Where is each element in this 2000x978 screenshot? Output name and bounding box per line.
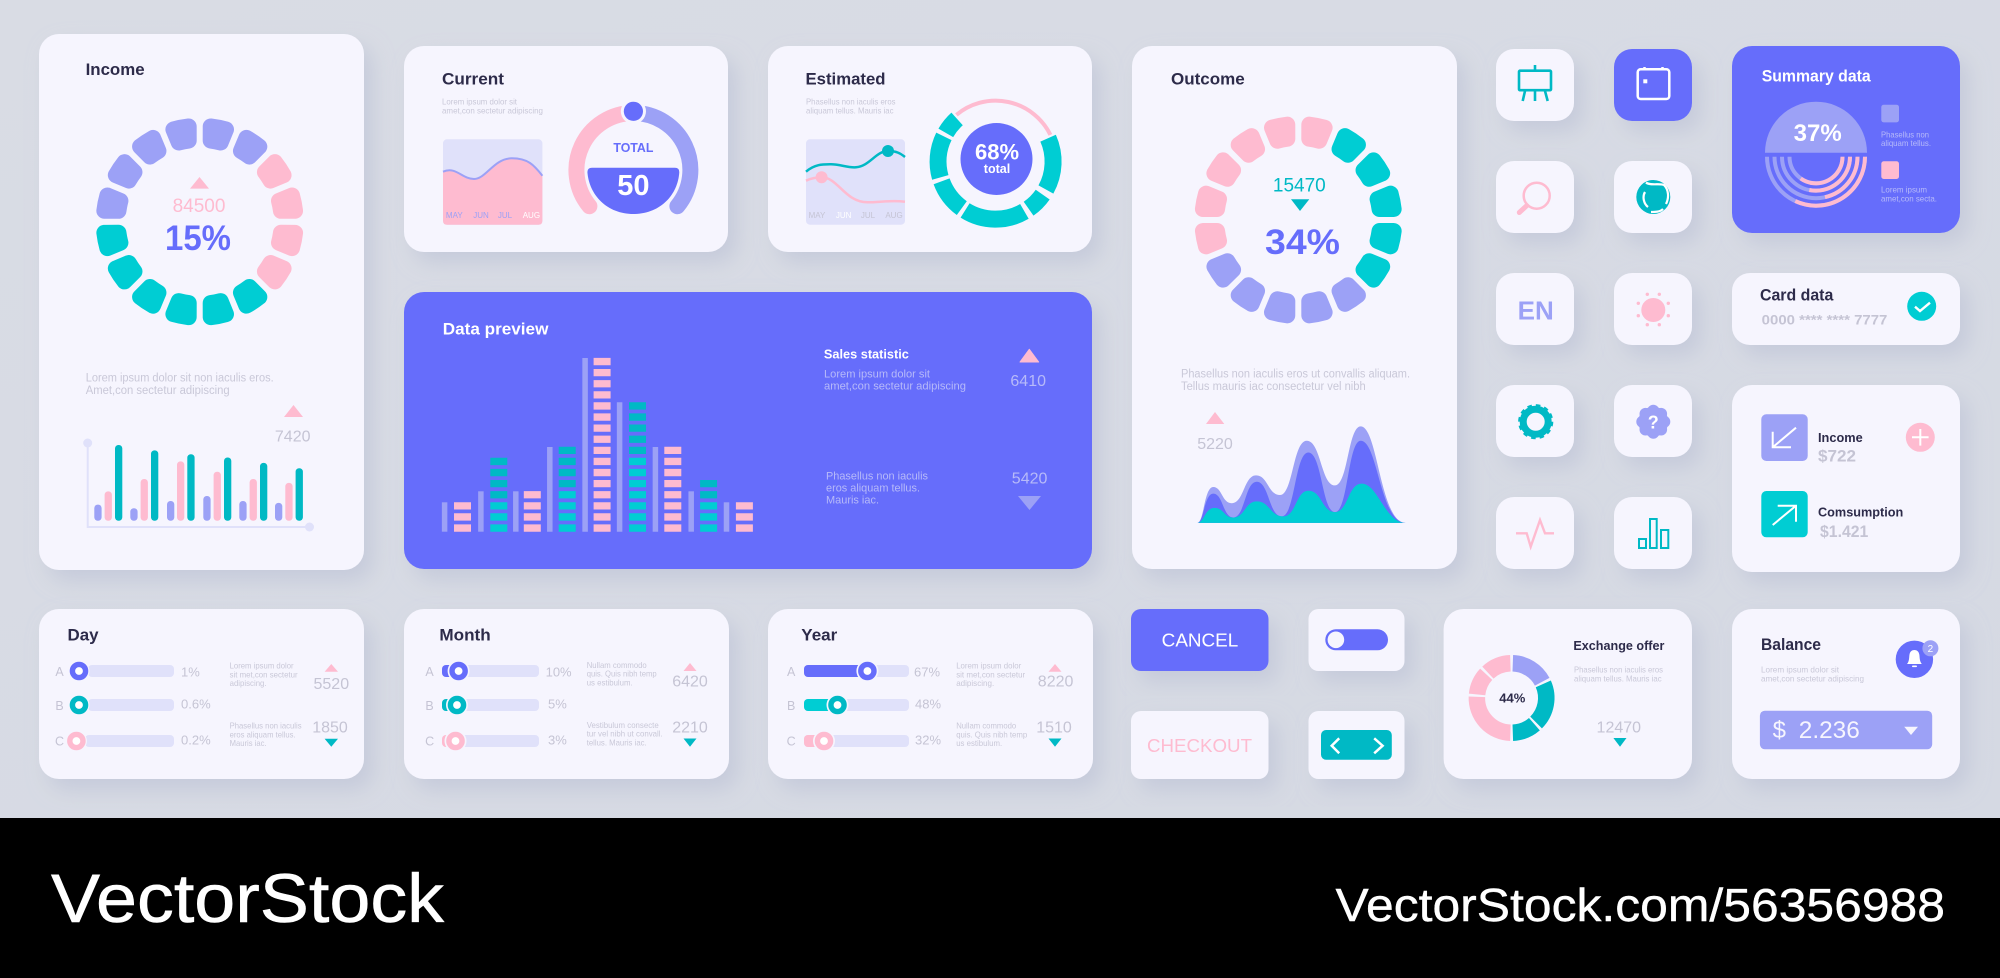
- income percent: 15%: [165, 219, 231, 258]
- button: cancel: [1131, 609, 1268, 671]
- year title: Year: [801, 626, 838, 645]
- panel: summary data: [1732, 46, 1960, 233]
- panel: current: [404, 46, 728, 252]
- month sliders: [425, 660, 572, 752]
- year sliders: C: [787, 735, 796, 749]
- arrow down: [1018, 496, 1041, 510]
- card number: 0000 **** **** 7777: [1762, 312, 1887, 327]
- panel: exchange offer: [1444, 609, 1692, 779]
- month descriptions: Vestibulum consecte: [587, 720, 659, 730]
- month stats: 2210: [672, 719, 708, 736]
- outcome description: [1181, 368, 1410, 393]
- year descriptions: quis. Quis nibh temp: [956, 729, 1027, 739]
- balance dropdown: $: [1773, 717, 1786, 744]
- segmented bar chart: [445, 358, 744, 532]
- icon: globe: [1614, 161, 1692, 233]
- estimated description: Phasellus non iaculis eros: [806, 97, 896, 107]
- panel: outcome: [1132, 46, 1457, 569]
- footer logo: VectorStock: [51, 860, 445, 937]
- day sliders: 0.2%: [181, 733, 211, 748]
- year descriptions: [956, 661, 1027, 748]
- balance title: Balance: [1761, 635, 1821, 654]
- month sliders: 10%: [546, 665, 572, 680]
- half-donut chart: [1765, 102, 1867, 206]
- year sliders: [787, 660, 941, 752]
- second description: eros aliquam tellus.: [826, 483, 920, 495]
- current area chart: JUL: [498, 211, 513, 220]
- current area chart: JUN: [473, 211, 489, 220]
- balance description: [1761, 665, 1864, 683]
- income label: Income: [1818, 431, 1863, 445]
- estimated line chart: MAY: [809, 211, 826, 220]
- sales description: [824, 368, 966, 393]
- icon: bar chart: [1614, 497, 1692, 569]
- pagination control: [1308, 711, 1404, 779]
- consumption amount: $1.421: [1820, 523, 1868, 541]
- arrow up: [190, 177, 209, 189]
- day sliders: B: [55, 699, 64, 713]
- exchange title: Exchange offer: [1573, 638, 1664, 653]
- year sliders: B: [787, 699, 795, 713]
- income description: Lorem ipsum dolor sit non iaculis eros.: [86, 372, 274, 384]
- second description: Phasellus non iaculis: [826, 470, 928, 482]
- month sliders: A: [425, 665, 434, 679]
- month sliders: 3%: [548, 733, 567, 748]
- year descriptions: us estibulum.: [956, 738, 1002, 748]
- legend text pink: [1881, 185, 1937, 204]
- toggle switch: [1308, 609, 1404, 671]
- panel: data preview: [404, 292, 1092, 569]
- month stats: 6420: [672, 674, 708, 691]
- outcome area chart: [1197, 426, 1406, 523]
- estimated title: Estimated: [806, 69, 886, 88]
- year sliders: 67%: [914, 665, 940, 680]
- icon: help badge: ?: [1648, 412, 1659, 432]
- arrow down: [1613, 738, 1626, 747]
- day title: Day: [68, 626, 99, 645]
- current title: Current: [442, 69, 504, 88]
- year descriptions: adipiscing.: [956, 678, 994, 688]
- check badge: [1907, 292, 1936, 321]
- card data title: Card data: [1760, 286, 1834, 305]
- year sliders: 32%: [915, 733, 941, 748]
- year sliders: 48%: [915, 697, 941, 712]
- day sliders: 0.6%: [181, 697, 211, 712]
- month descriptions: us estibulum.: [587, 677, 633, 687]
- second description: Mauris iac.: [826, 495, 879, 507]
- legend text purple: aliquam tellus.: [1881, 138, 1931, 148]
- icon: pulse: [1496, 497, 1574, 569]
- sales statistic heading: Sales statistic: [824, 347, 909, 361]
- panel: year: [768, 609, 1093, 779]
- balance description: amet,con sectetur adipiscing: [1761, 673, 1864, 683]
- footer band: [0, 818, 2000, 978]
- estimated line chart: JUN: [836, 211, 852, 220]
- month descriptions: tellus. Mauris iac.: [587, 737, 647, 747]
- income arrow tile: [1761, 414, 1808, 461]
- arrow down: [1291, 199, 1309, 211]
- sales value up: 6410: [1010, 373, 1046, 390]
- day descriptions: sit met,con sectetur: [230, 669, 298, 679]
- outcome percent: 34%: [1265, 223, 1340, 262]
- outcome description: Phasellus non iaculis eros ut convallis aliquam.: [1181, 368, 1410, 380]
- year descriptions: Lorem ipsum dolor: [956, 661, 1021, 671]
- current description: [442, 97, 543, 115]
- sales description: Lorem ipsum dolor sit: [824, 368, 930, 380]
- month sliders: C: [425, 735, 434, 749]
- month stats: [672, 663, 708, 747]
- estimated ring: total: [984, 162, 1010, 176]
- month descriptions: quis. Quis nibh temp: [587, 669, 657, 679]
- outcome segmented ring: [1200, 122, 1396, 318]
- legend text pink: Lorem ipsum: [1881, 185, 1927, 195]
- legend swatch purple: [1881, 105, 1899, 122]
- panel: estimated: [768, 46, 1092, 252]
- estimated description: aliquam tellus. Mauris iac: [806, 105, 894, 115]
- day sliders: 1%: [181, 665, 200, 680]
- second description: [826, 470, 928, 507]
- panel: month: [404, 609, 729, 779]
- estimated line chart: [806, 139, 905, 225]
- day stats: 1850: [312, 719, 348, 736]
- income stat: 7420: [275, 428, 311, 445]
- year sliders: A: [787, 665, 796, 679]
- sales description: amet,con sectetur adipiscing: [824, 381, 966, 393]
- balance dropdown: 2.236: [1799, 717, 1860, 744]
- year stats: [1036, 664, 1073, 747]
- outcome amount: 15470: [1273, 175, 1326, 196]
- day descriptions: adipiscing.: [230, 678, 267, 688]
- outcome title: Outcome: [1171, 70, 1245, 89]
- panel: day: [39, 609, 364, 779]
- icon: settings gear: [1496, 385, 1574, 457]
- income description: Amet,con sectetur adipiscing: [86, 385, 230, 397]
- estimated line chart: AUG: [885, 211, 903, 220]
- day descriptions: Mauris iac.: [230, 738, 267, 748]
- year stats: 8220: [1038, 674, 1073, 691]
- legend swatch pink: [1881, 161, 1899, 179]
- month descriptions: Nullam commodo: [587, 660, 647, 670]
- income bar chart: [83, 438, 314, 532]
- exchange donut: 44%: [1499, 691, 1526, 706]
- exchange description: [1574, 665, 1663, 683]
- current area chart: MAY: [446, 211, 463, 220]
- day descriptions: Phasellus non iaculis: [230, 721, 302, 731]
- balance dropdown: [1760, 711, 1932, 749]
- icon: language EN: [1496, 273, 1574, 345]
- sales value down: 5420: [1012, 470, 1047, 487]
- income amount: 84500: [173, 196, 225, 217]
- income segmented ring: [102, 124, 298, 320]
- outcome stat: 5220: [1197, 436, 1233, 453]
- month sliders: B: [425, 699, 434, 713]
- estimated ring: 68%: [975, 139, 1019, 164]
- day sliders: A: [55, 665, 64, 679]
- year stats: 1510: [1036, 719, 1072, 736]
- icon: language EN: EN: [1518, 295, 1554, 325]
- consumption label: Comsumption: [1818, 506, 1903, 520]
- notification bell: 2: [1928, 644, 1934, 655]
- estimated line chart: JUL: [861, 211, 876, 220]
- day stats: 5520: [314, 676, 349, 693]
- day descriptions: Lorem ipsum dolor: [230, 661, 294, 671]
- gauge: [576, 99, 690, 214]
- gauge: 50: [617, 170, 650, 202]
- icon: help badge: [1614, 385, 1692, 457]
- month title: Month: [439, 626, 491, 645]
- exchange description: aliquam tellus. Mauris iac: [1574, 673, 1662, 683]
- notification bell: [1896, 640, 1938, 678]
- day stats: [312, 664, 349, 747]
- balance description: Lorem ipsum dolor sit: [1761, 665, 1840, 675]
- button: checkout: CHECKOUT: [1147, 735, 1252, 756]
- year descriptions: Nullam commodo: [956, 721, 1016, 731]
- icon: easel: [1496, 49, 1574, 121]
- day sliders: [55, 660, 211, 752]
- income amount: $722: [1818, 447, 1856, 465]
- summary title: Summary data: [1762, 67, 1871, 86]
- arrow up: [1020, 349, 1039, 362]
- panel: income and consumption: [1732, 385, 1960, 572]
- add button: [1906, 423, 1935, 452]
- current area chart: [443, 139, 542, 225]
- exchange description: Phasellus non iaculis eros: [1574, 665, 1663, 675]
- gauge: TOTAL: [613, 140, 653, 155]
- footer url: VectorStock.com/56356988: [1336, 879, 1945, 931]
- estimated ring: [938, 101, 1053, 219]
- arrow up: [1206, 412, 1224, 424]
- arrow up small: [284, 405, 303, 417]
- day descriptions: [230, 661, 302, 748]
- month descriptions: [587, 660, 663, 747]
- consumption arrow tile: [1761, 491, 1808, 537]
- income title: Income: [86, 60, 145, 79]
- legend text purple: [1881, 129, 1931, 148]
- icon: search: [1496, 161, 1574, 233]
- current description: amet,con sectetur adipiscing: [442, 105, 543, 115]
- panel: balance: [1732, 609, 1960, 779]
- day descriptions: eros aliquam tellus.: [230, 729, 296, 739]
- legend text pink: amet,con secta.: [1881, 194, 1937, 204]
- half-donut chart: 37%: [1794, 120, 1842, 147]
- month descriptions: tur vel nibh ut convall.: [587, 729, 663, 739]
- button: cancel: CANCEL: [1162, 630, 1238, 651]
- outcome description: Tellus mauris iac consectetur vel nibh: [1181, 381, 1366, 393]
- month sliders: 5%: [548, 697, 567, 712]
- button: checkout: [1131, 711, 1268, 779]
- icon: calendar: [1614, 49, 1692, 121]
- year descriptions: sit met,con sectetur: [956, 669, 1025, 679]
- icon: sun: [1614, 273, 1692, 345]
- panel: income: [39, 34, 364, 570]
- panel: card data: [1732, 273, 1960, 345]
- data preview title: Data preview: [443, 319, 549, 338]
- current area chart: AUG: [523, 211, 540, 220]
- legend text purple: Phasellus non: [1881, 129, 1929, 139]
- estimated description: [806, 97, 896, 115]
- exchange donut: [1477, 663, 1546, 733]
- income description: [86, 372, 274, 397]
- current description: Lorem ipsum dolor sit: [442, 97, 518, 107]
- exchange stat: 12470: [1597, 719, 1641, 736]
- day sliders: C: [55, 735, 64, 749]
